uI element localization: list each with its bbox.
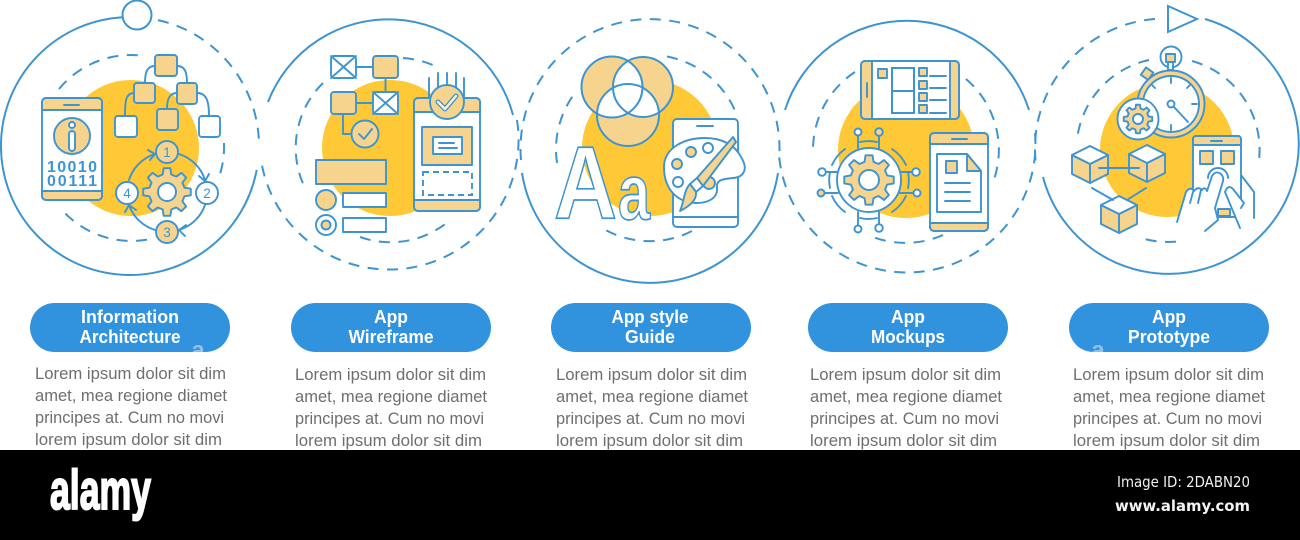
icon: phone with info sign and binary: 10010 (47, 159, 97, 176)
text block: column 3: Lorem ipsum dolor sit dim (556, 365, 747, 384)
website: www.alamy.com (1115, 497, 1250, 515)
alamy logo: alamy (50, 458, 151, 521)
icon: hand tapping phone (1177, 136, 1254, 231)
yellow background circle (63, 80, 199, 216)
outer ring (520, 19, 780, 283)
outer ring (261, 19, 519, 270)
heading pill: Information Architecture: Architecture (80, 327, 180, 347)
icon: four-step cycle with gear: 1 (163, 145, 171, 160)
heading pill: App style Guide: App style (612, 307, 688, 327)
heading pill: App Prototype: a (1091, 337, 1105, 364)
icon: flowchart (115, 55, 220, 137)
icon: wireframe flow (331, 56, 398, 148)
text block: column 5: lorem ipsum dolor sit dim (1073, 431, 1260, 450)
inner dashed ring (813, 72, 999, 243)
icon: portrait phone with document (930, 133, 988, 231)
icon: four-step cycle with gear (116, 141, 218, 243)
inner dashed ring (1077, 60, 1260, 242)
yellow background circle (838, 82, 974, 218)
icon: four-step cycle with gear: 3 (163, 225, 171, 240)
footer: black stock-photo banner (0, 450, 1300, 540)
icon: phone with info sign and binary: 00111 (47, 173, 97, 190)
text block: column 2: Lorem ipsum dolor sit dim (295, 365, 486, 384)
text block: column 1: amet, mea regione diamet (35, 386, 227, 405)
text block: column 4 (810, 365, 1002, 450)
outer ring with progress marker (1, 0, 259, 275)
heading pill: Information Architecture: Information (81, 307, 179, 327)
text block: column 5 (1073, 365, 1265, 450)
heading pill: App style Guide (551, 303, 751, 352)
text block: column 3: amet, mea regione diamet (556, 387, 748, 406)
panel: app wireframe illustration (261, 19, 519, 270)
heading pill: App style Guide: Guide (625, 327, 675, 347)
icon: gear with circuit nodes (818, 128, 920, 232)
heading pill: App Prototype: App (1152, 307, 1186, 327)
heading pill: App Prototype (1069, 303, 1269, 352)
panel: app style guide illustration (520, 19, 780, 283)
text block: column 4: amet, mea regione diamet (810, 387, 1002, 406)
text block: column 2: principes at. Cum no movi (295, 409, 484, 428)
yellow background circle (322, 80, 458, 216)
text block: column 1: lorem ipsum dolor sit dim (35, 430, 222, 449)
text block: column 1 (35, 364, 227, 449)
panel: information architecture illustration (1, 0, 259, 275)
text block: column 3: principes at. Cum no movi (556, 409, 745, 428)
heading pill: App Prototype: Prototype (1128, 327, 1210, 347)
text block: column 3: lorem ipsum dolor sit dim (556, 431, 743, 450)
text block: column 4: Lorem ipsum dolor sit dim (810, 365, 1001, 384)
icon: settings gear badge (1118, 98, 1158, 140)
icon: phone with info sign and binary (42, 98, 102, 200)
text block: column 2: amet, mea regione diamet (295, 387, 487, 406)
icon: form blocks (316, 160, 386, 235)
heading pill: App Wireframe: App (374, 307, 408, 327)
icon: typography letters: a (618, 148, 650, 236)
yellow background circle (582, 80, 718, 216)
heading pill: Information Architecture (30, 303, 230, 352)
icon: landscape phone mockup (861, 61, 959, 119)
icon: colour venn diagram (582, 56, 673, 146)
text block: column 5: principes at. Cum no movi (1073, 409, 1262, 428)
heading pill: App Wireframe: Wireframe (348, 327, 434, 347)
text block: column 3 (556, 365, 748, 450)
text block: column 4: lorem ipsum dolor sit dim (810, 431, 997, 450)
icon: stopwatch (1138, 46, 1204, 138)
inner dashed ring (296, 58, 449, 242)
heading pill: App Mockups: Mockups (871, 327, 945, 347)
outer ring (779, 21, 1035, 272)
panel: app mockups illustration (779, 21, 1035, 272)
heading pill: Information Architecture: a (191, 337, 205, 364)
text block: column 5: amet, mea regione diamet (1073, 387, 1265, 406)
panel: app prototype illustration (1035, 6, 1299, 274)
yellow background circle (1100, 83, 1234, 217)
heading pill: App Mockups: App (891, 307, 925, 327)
icon: four-step cycle with gear: 2 (203, 186, 211, 201)
icon: four-step cycle with gear: 4 (123, 186, 131, 201)
outer ring with play marker (1035, 6, 1299, 274)
text block: column 5: Lorem ipsum dolor sit dim (1073, 365, 1264, 384)
icon: typography letters: A (554, 125, 617, 240)
image id: Image ID: 2DABN20 (1117, 473, 1250, 491)
icon: phone with approved layout (414, 73, 480, 211)
icon: connected cubes (1072, 145, 1165, 233)
icon: phone with palette and brush (664, 119, 745, 227)
inner dashed ring (59, 55, 224, 241)
heading pill: App Mockups (808, 303, 1008, 352)
inner dashed ring (556, 56, 736, 241)
heading pill: App Wireframe (291, 303, 491, 352)
text block: column 1: Lorem ipsum dolor sit dim (35, 364, 226, 383)
text block: column 2: lorem ipsum dolor sit dim (295, 431, 482, 450)
text block: column 4: principes at. Cum no movi (810, 409, 999, 428)
text block: column 1: principes at. Cum no movi (35, 408, 224, 427)
text block: column 2 (295, 365, 487, 450)
